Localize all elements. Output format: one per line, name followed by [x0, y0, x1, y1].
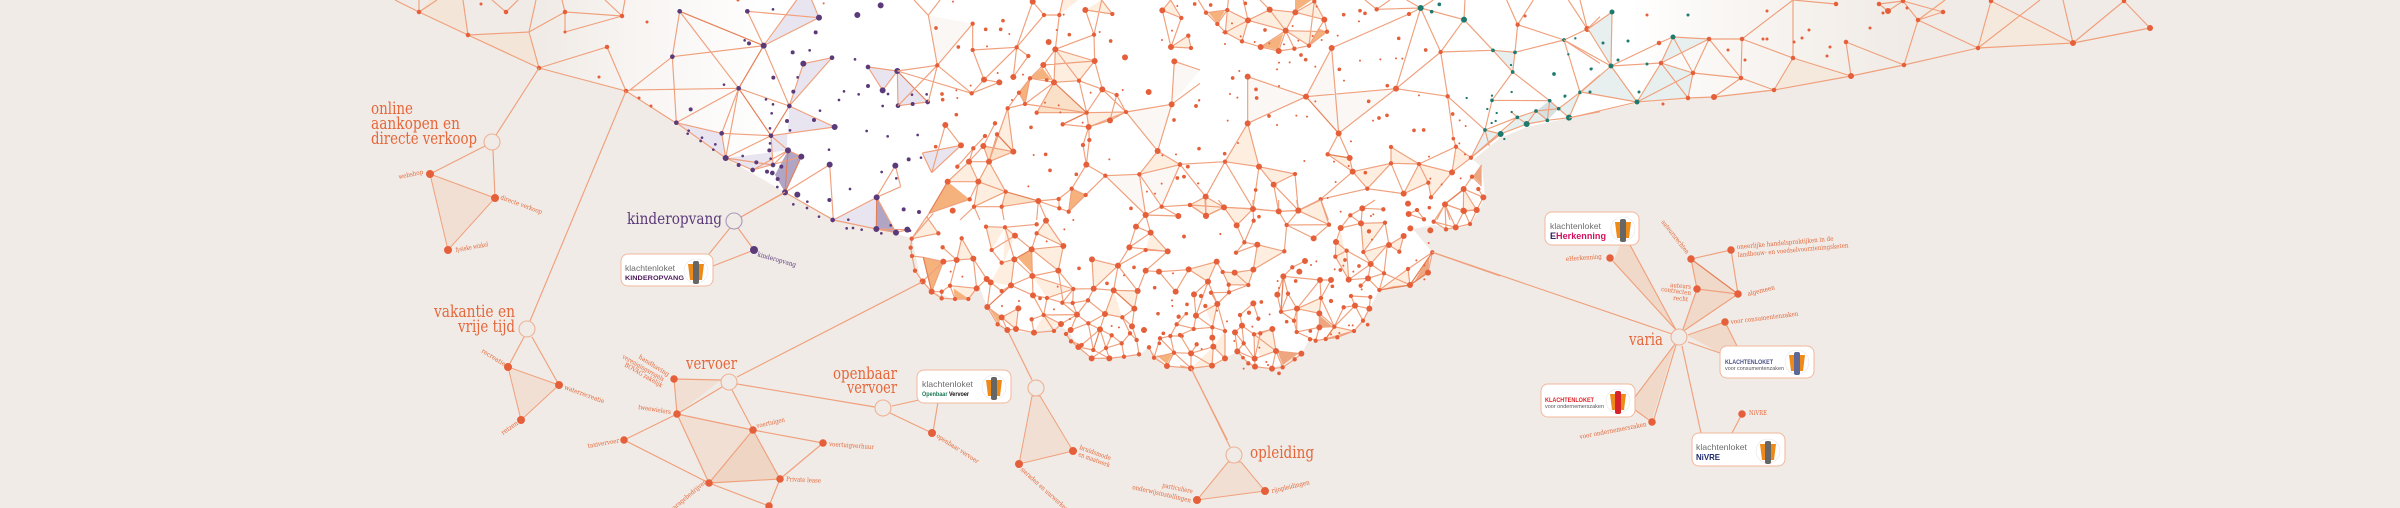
label: voertuigen: voertuigen — [755, 416, 786, 430]
heading: vervoer — [846, 378, 898, 398]
logo: klachtenloket voor ondernemerszaken: voor ondernemerszaken — [1545, 404, 1604, 410]
triangle fill — [430, 174, 495, 250]
links — [890, 400, 938, 433]
nodes — [624, 379, 823, 506]
nodes — [508, 367, 559, 420]
network: orange central upper — [824, 0, 1200, 220]
label: contracten: contracten — [1661, 285, 1692, 297]
heading: varia — [1628, 330, 1663, 350]
logo: klachtenloket NiVRE: NiVRE — [1696, 452, 1720, 462]
label: voor ondernemerszaken: voor ondernemerszaken — [1578, 420, 1647, 441]
links — [508, 91, 626, 385]
label: kinderopvang — [756, 250, 797, 269]
triangle — [508, 367, 559, 420]
hub circle — [721, 374, 737, 390]
label: bruidsmode: bruidsmode — [1078, 443, 1112, 462]
label: openbaar vervoer — [935, 432, 981, 466]
fills — [1613, 245, 1738, 420]
hub circle — [519, 321, 535, 337]
logo: klachtenloket openbaar vervoer: Openbaar Vervoer — [922, 391, 969, 398]
logo: klachtenloket openbaar vervoer — [917, 370, 1011, 403]
label: eHerkenning: eHerkenning — [1566, 253, 1602, 263]
node — [750, 246, 758, 254]
panel: varia — [1432, 212, 1849, 466]
panel: openbaar vervoer — [833, 364, 1011, 466]
nodes — [430, 174, 495, 250]
label: NiVRE: NiVRE — [1749, 409, 1767, 417]
heading: online — [371, 99, 413, 119]
heading: vrije tijd — [457, 317, 515, 337]
logo: klachtenloket eHerkenning — [1545, 212, 1639, 245]
network: lower right orange clusters — [1180, 200, 1500, 440]
hub circle — [1226, 447, 1242, 463]
label: recreatie: recreatie — [480, 347, 507, 368]
label: recht: recht — [1673, 294, 1689, 303]
logo: klachtenloket eHerkenning: klachtenloket — [1550, 221, 1602, 231]
fills — [674, 379, 753, 483]
label: private lease: Private lease — [786, 475, 821, 485]
label: oneerlijke handelspraktijken: oneerlijke handelspraktijken in de — [1736, 235, 1834, 251]
heading: openbaar — [833, 364, 898, 384]
node — [928, 429, 936, 437]
nodes — [1019, 451, 1073, 464]
logo: klachtenloket openbaar vervoer: klachtenloket — [922, 379, 974, 389]
label: taxivervoer: taxivervoer — [587, 436, 621, 450]
hub circle — [875, 400, 891, 416]
heading: vakantie en — [433, 302, 515, 322]
logo: klachtenloket voor consumentenzaken: voor consumentenzaken — [1725, 366, 1784, 372]
label: en maatwerk: en maatwerk — [1077, 450, 1111, 469]
panel: vervoer — [587, 282, 922, 508]
logo: klachtenloket NiVRE — [1692, 433, 1785, 466]
dark link — [1691, 259, 1738, 294]
label: landbouw en voedselvoorzieningsketen: landbouw- en voedselvoorzieningsketen — [1737, 241, 1849, 259]
label: fysieke winkel: fysieke winkel — [455, 240, 489, 254]
label: BOVAG zakelijk: BOVAG zakelijk — [623, 361, 664, 389]
label: webshop: webshop — [398, 168, 424, 181]
label: onderwijsinstellingen: onderwijsinstellingen — [1132, 483, 1192, 504]
triangle — [1019, 396, 1073, 464]
logo: klachtenloket NiVRE: klachtenloket — [1696, 442, 1748, 452]
hub circle — [726, 213, 742, 229]
panel: kinderopvang — [621, 192, 797, 286]
logo: klachtenloket kinderopvang — [621, 254, 713, 286]
label: algemeen: algemeen — [1747, 283, 1776, 298]
nodes — [1610, 250, 1742, 422]
triangle and links — [430, 68, 539, 198]
logo: klachtenloket kinderopvang: KINDEROPVANG — [625, 275, 684, 282]
nodes — [1197, 491, 1265, 500]
logo: klachtenloket eHerkenning: EHerkenning — [1550, 231, 1606, 241]
logo: klachtenloket voor ondernemerszaken: KLACHTENLOKET — [1545, 397, 1594, 404]
label: handhaving: handhaving — [637, 353, 671, 378]
label: auteurs: auteurs — [1670, 281, 1691, 291]
panel: online aankopen en directe verkoop — [371, 68, 543, 254]
network: lower central orange — [911, 213, 1220, 380]
label: reizen: reizen — [500, 419, 520, 437]
label: auteursrechten: auteursrechten — [1659, 218, 1691, 256]
heading: vervoer — [685, 354, 738, 374]
links — [624, 282, 922, 506]
label: voor consumentenzaken: voor consumentenzaken — [1729, 310, 1799, 326]
network: purple kinderopvang cluster — [630, 0, 928, 233]
heading: aankopen en — [371, 114, 460, 134]
network: upper right orange and teal cluster — [1180, 0, 1600, 220]
label: voertuigverhuur: voertuigverhuur — [828, 440, 875, 451]
heading: directe verkoop — [371, 129, 477, 149]
heading: kinderopvang — [627, 210, 722, 228]
panel: opleiding — [1132, 368, 1314, 504]
label: particuliere: particuliere — [1162, 481, 1194, 495]
triangle — [1197, 462, 1265, 500]
links — [709, 192, 785, 266]
label: directe verkoop: directe verkoop — [499, 193, 543, 216]
hub circle — [1028, 380, 1044, 396]
network: right tail — [1525, 0, 2150, 118]
label: rijopleidingen: rijopleidingen — [1271, 478, 1310, 495]
logo: klachtenloket voor ondernemerszaken — [1541, 384, 1635, 417]
links — [1432, 245, 1742, 433]
hub circle — [484, 134, 500, 150]
label: waterrecreatie: waterrecreatie — [563, 383, 606, 405]
logo: klachtenloket voor consumentenzaken — [1720, 346, 1814, 378]
panel: sieraden en bruidsmode — [1019, 380, 1112, 508]
label: tweewielers: tweewielers — [638, 403, 672, 416]
heading: opleiding — [1250, 443, 1314, 463]
label: verenigingsregels: verenigingsregels — [620, 352, 666, 383]
link to network — [1191, 368, 1230, 447]
logo: klachtenloket kinderopvang: klachtenloket — [625, 263, 676, 273]
panel: vakantie en vrije tijd — [433, 91, 626, 437]
network: upper left tail — [395, 0, 738, 123]
darker fill — [709, 430, 780, 483]
logo: klachtenloket voor consumentenzaken: KLACHTENLOKET — [1725, 359, 1773, 366]
hub circle — [1671, 329, 1687, 345]
white cloud behind network — [395, 0, 2170, 369]
